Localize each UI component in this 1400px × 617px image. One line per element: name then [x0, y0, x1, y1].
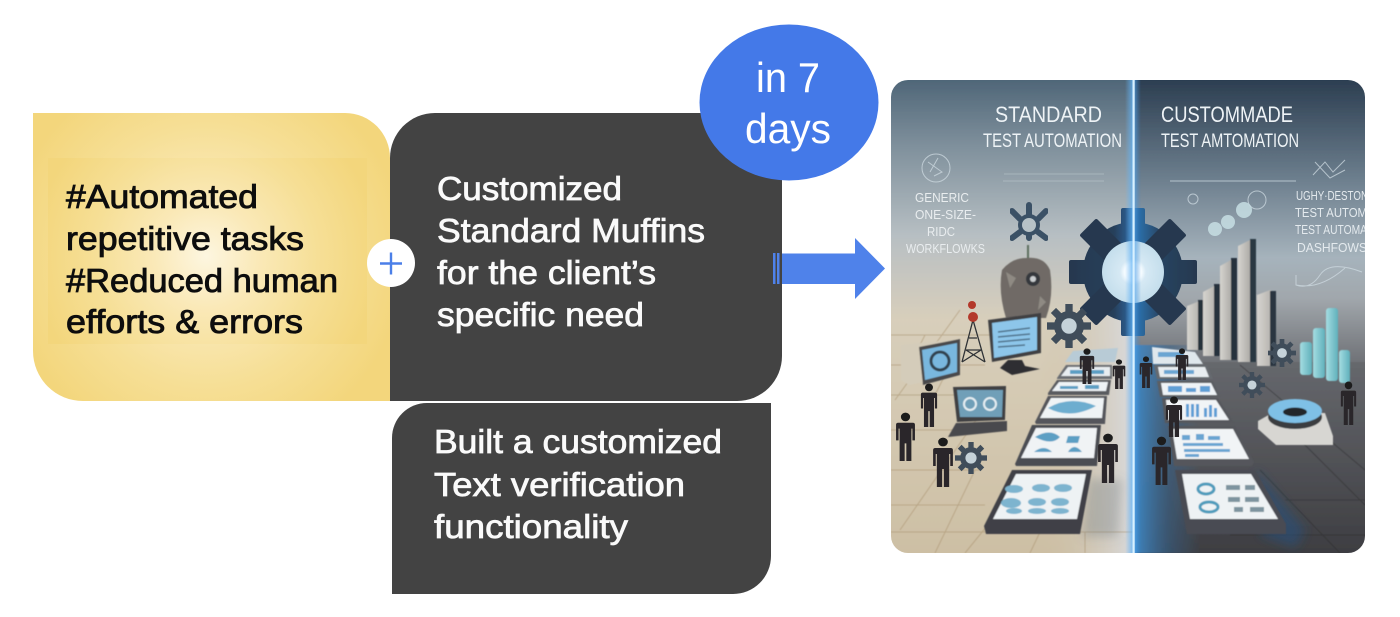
right label: custommade test automation: CUSTOMMADE — [1161, 102, 1293, 127]
benefits text: efforts & errors — [66, 303, 303, 340]
left caption list: GENERIC — [915, 190, 969, 205]
icon: plus badge — [367, 239, 415, 287]
icon: laptop — [948, 386, 1007, 437]
chart: grey bars — [1187, 239, 1276, 366]
icon: old monitor — [901, 339, 960, 385]
icon: central gear — [1069, 208, 1197, 336]
text verification copy: functionality — [434, 508, 629, 545]
panel: customized standard muffins (dark) — [390, 113, 782, 401]
people: standard side — [896, 348, 1125, 487]
benefits text: #Reduced human — [66, 262, 338, 299]
right caption list: TEST AUTOMA — [1295, 222, 1367, 237]
text verification copy — [434, 423, 722, 545]
divider: glowing light beam — [1125, 78, 1141, 556]
illustration: standard vs custommade test automation — [888, 78, 1368, 556]
left label: standard test automation — [983, 106, 1121, 147]
benefits text: repetitive tasks — [66, 220, 304, 257]
right caption list: DASHFOWS — [1297, 240, 1367, 255]
customized muffins text — [437, 170, 705, 333]
shadows under tablets — [1082, 470, 1305, 548]
right label: custommade test automation — [1161, 106, 1298, 147]
customized muffins text: specific need — [437, 296, 644, 333]
left caption list — [906, 190, 985, 256]
icon: rusty machine — [1001, 245, 1051, 318]
decorative floating discs — [1208, 202, 1252, 236]
right label: custommade test automation: TEST AMTOMATION — [1161, 131, 1299, 152]
text highlight block — [48, 158, 367, 344]
benefits text: #Automated — [66, 178, 258, 215]
icon: cogs near gear — [955, 304, 1296, 474]
left caption list: WORKFLOWKS — [906, 241, 985, 256]
left label: standard test automation: TEST AUTOMATION — [983, 131, 1122, 152]
right background: custommade side — [1134, 78, 1368, 556]
chart: cyan bars — [1300, 308, 1350, 383]
left caption list: ONE-SIZE- — [915, 207, 976, 222]
right caption list: TEST AUTOM — [1295, 205, 1367, 220]
left background: standard side — [888, 78, 1134, 556]
text verification copy: Text verification — [434, 466, 685, 503]
people: custommade side — [1140, 348, 1356, 485]
panel: benefits (yellow) — [33, 113, 390, 401]
right caption list — [1295, 191, 1365, 252]
callout: in 7 days: in 7 — [756, 54, 820, 101]
customized muffins text: Standard Muffins — [437, 212, 705, 249]
right caption list: UGHY·DESTON — [1296, 188, 1368, 203]
customized muffins text: for the client’s — [437, 254, 656, 291]
text verification copy: Built a customized — [434, 423, 722, 460]
icon: flower cog — [1012, 205, 1046, 238]
icon: antenna tower — [962, 301, 985, 362]
icon: ring on pedestal — [1258, 399, 1333, 445]
left label: standard test automation: STANDARD — [995, 102, 1102, 127]
decorative line icons top — [922, 154, 1362, 286]
icon: desktop monitor — [988, 313, 1041, 375]
customized muffins text: Customized — [437, 170, 622, 207]
benefits text — [66, 178, 338, 340]
right path: tablets — [1152, 347, 1286, 534]
left caption list: RIDC — [927, 224, 955, 239]
callout: in 7 days: days — [745, 105, 831, 152]
arrow: to illustration — [773, 238, 885, 299]
panel: text verification (dark) — [392, 403, 771, 594]
left path: tablets — [984, 348, 1118, 534]
callout: in 7 days — [700, 24, 878, 180]
